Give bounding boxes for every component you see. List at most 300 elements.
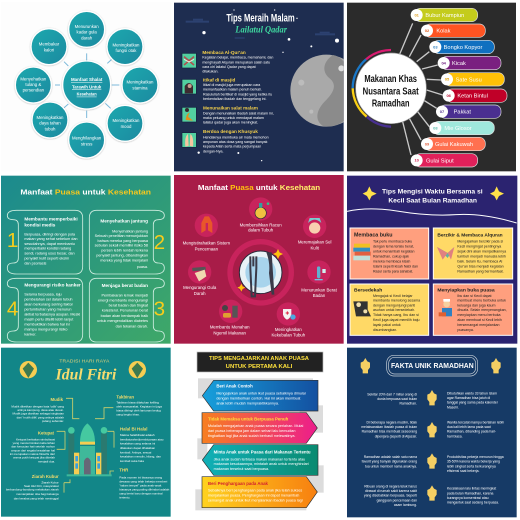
box 3: Pembakaran lemak menjadi xyxy=(102,293,148,297)
box 4: akibat terbatasnya asupan. Meski xyxy=(24,312,80,316)
fact row 3: tua untuk memberi nama anaknya. xyxy=(365,464,417,468)
tip 1: dengan memberikan contoh. Hal ini akan membuat xyxy=(216,396,300,400)
card: membaca buku: Islami seperti kisah Nabi dan xyxy=(373,264,418,268)
card: bersedekah: Bersedekah xyxy=(354,288,382,294)
box 3: Menjaga berat badan xyxy=(102,283,148,288)
text: ziarah kubur: memanjatkan doa bagi keluarga xyxy=(16,492,59,496)
circle: menyehatkan tulang dan persendian xyxy=(15,67,51,103)
fact row 4: asam lambung. xyxy=(394,503,417,507)
title xyxy=(226,12,295,35)
text: halal bi halal xyxy=(120,427,164,463)
center circle heading xyxy=(63,61,111,109)
box 2: persen lebih rendah terkena xyxy=(101,249,149,253)
text: thr: yang berisi baru dengan nominal xyxy=(119,492,163,496)
card: membaca buku: dengan tema terlalu berat, xyxy=(373,244,414,248)
card: menyiapkan buka puasa: Menyiapkan buka puasa xyxy=(437,288,495,294)
card: membaca buku xyxy=(350,228,429,279)
tip 2: Mulailah mengajarkan anak puasa secara perlahan. Mulai xyxy=(208,424,303,428)
circle: meningkatkan daya tahan tubuh xyxy=(32,102,68,138)
title xyxy=(382,189,483,204)
box 3: energi membantu mengurangi xyxy=(98,298,148,302)
box 1: penyakit kulit seperti eksim xyxy=(24,256,69,260)
item 7 xyxy=(436,105,501,118)
circle: menyehatkan tulang dan persendian: persendian xyxy=(23,88,45,93)
label: menurunkan berat badan: Badan xyxy=(313,293,326,298)
fact row 2: dua kali lebih lama pada saat xyxy=(447,425,491,429)
title: Kecil Saat Bulan Ramadhan xyxy=(388,197,477,204)
title: Idul Fitri xyxy=(55,366,117,383)
card: menyiapkan buka puasa: bersemangat menjalankan xyxy=(457,323,500,327)
text: halal bi halal: dilakukan dapat dihalalkan xyxy=(120,446,156,450)
circle: membakar kalori xyxy=(31,29,67,65)
title: FAKTA UNIK RAMADHAN xyxy=(391,363,474,370)
circle: menurunkan kadar gula darah: darah xyxy=(81,35,93,40)
tip 2: tingkatkan lagi jika anak sudah berhasil melewatinya. xyxy=(208,434,295,438)
box 3: kolesterol. Penurunan berat xyxy=(102,309,149,313)
stars xyxy=(197,9,339,161)
title: Manfaat Puasa untuk Kesehatan xyxy=(20,187,151,196)
card: berzikir dan membaca alquran: Kecil mengingat pentingnya xyxy=(457,244,501,248)
icon: ketupat kanan xyxy=(129,361,146,378)
item 6: 06 xyxy=(446,93,452,98)
label: menahan ngemil: Membantu Menahan xyxy=(210,325,250,330)
text: halal bi halal: kembali suka hala xyxy=(120,459,144,463)
tip 3 xyxy=(202,445,318,475)
panel: manfaat puasa lingkaran xyxy=(174,175,344,344)
item 7: 07 xyxy=(440,109,445,114)
text: ketupat: Ketupat xyxy=(38,430,55,435)
box 3: untuk mengendalikan diabetes xyxy=(97,319,148,323)
box 4: masih perlu diteliti lebih lanjut xyxy=(24,317,74,321)
text: halal bi halal: Makna halalbihalal adalah xyxy=(120,433,155,437)
item 6: Ketan Bintul xyxy=(457,94,488,100)
tip 2 xyxy=(202,413,317,443)
text: ketupat: yang mencerminkan kebersihan xyxy=(13,441,55,445)
text: berdoa dengan khusyuk: ampunan atas dosa yang sangat banyak xyxy=(203,140,268,144)
tip 4: semangat anak untuk ikut menjalankan ibadah puasa lagi xyxy=(208,498,303,502)
text: itikaf: Itikaf di masjid juga merupakan cara xyxy=(203,83,260,87)
box 2 xyxy=(89,210,165,274)
text: itikaf xyxy=(203,77,272,101)
fact row 2: melaksanakan ibadah puasa di bulan xyxy=(361,425,417,429)
text: takbiran: Takbiran xyxy=(116,394,134,399)
text: mudik: dari "mulih dilik' yang artinya adalah xyxy=(17,415,64,419)
central circle title: Makanan Khas xyxy=(364,74,417,85)
item 5 xyxy=(441,73,504,86)
card: membaca buku: Rasul serta para sahabat. xyxy=(373,269,413,273)
item 4 xyxy=(438,56,501,70)
circle: meningkatkan fungsi otak: Meningkatkan xyxy=(113,42,140,47)
label: mengurangi gula darah xyxy=(183,285,217,296)
item 2: Kolak xyxy=(436,28,451,34)
connector lines xyxy=(399,23,443,155)
circle: meningkatkan stamina: Meningkatkan xyxy=(127,80,154,85)
text: menunaikan salat malam: maka peluang untuk mendapat malam xyxy=(203,116,264,120)
text: mudik: Mudik diketikan dengan kata 'udik' yang xyxy=(11,404,64,408)
center circle heading: Kesehatan xyxy=(77,92,97,98)
box 3 xyxy=(89,278,165,342)
title bar xyxy=(197,352,323,372)
box 2: Menyehatkan jantung xyxy=(112,229,148,233)
card: bersedekah: disumbangkan. xyxy=(373,328,397,332)
title xyxy=(55,358,117,383)
circle: meningkatkan fungsi otak: fungsi otak xyxy=(116,48,137,53)
tip 4: Sebaiknya beri penghargaan pada anak jika telah sukses xyxy=(208,488,302,492)
box 1: dan psoriasis xyxy=(24,261,47,265)
text: takbiran: Takbiran biasa dilakukan keliling xyxy=(116,400,159,404)
circle: menyehatkan tulang dan persendian: Menyehatkan xyxy=(20,76,47,81)
stars left xyxy=(363,186,377,200)
tip 4: Beri Penghargaan pada Anak xyxy=(208,481,269,486)
text: ketupat: warna putih ketupat jika dibelah xyxy=(13,456,55,460)
tip 1: Mengajarkan anak untuk ikut puasa sebaiknya dimulai xyxy=(216,392,306,396)
text: ziarah kubur: Ziarah Kubur xyxy=(32,474,59,479)
text: berdoa dengan khusyuk: Hendaknya membuka air mata memohon xyxy=(203,135,269,139)
box 1: Berpuasa, diiringi dengan pola xyxy=(24,232,76,236)
tip 3: makanan tersebut saat berpuasa. xyxy=(214,467,269,471)
circle: membakar kalori: Membakar xyxy=(39,42,60,47)
item 5: 05 xyxy=(445,77,450,82)
box 4: membuktikan bahwa hal ini xyxy=(24,322,70,326)
text: berdoa dengan khusyuk: kepada Allah serta mata perjumpaan xyxy=(203,145,261,149)
card: berzikir dan membaca alquran xyxy=(433,228,513,279)
item 3: 03 xyxy=(433,44,438,49)
text: halal bi halal: Halal Bi Halal xyxy=(120,427,147,432)
panel: tips meraih malam lailatul qadar xyxy=(174,3,362,171)
label: sistem pencernaan: Pencernaan xyxy=(195,246,219,251)
box 1: sesudahnya, dapat membantu xyxy=(24,242,75,246)
fact row 2: Ramadhan bisa membuat seseorang xyxy=(362,430,417,434)
fact row 1: agar Ramadhan bisa jatuh di xyxy=(447,396,490,400)
text: menunaikan salat malam: Dengan menunaikan ibadah salat malam ini, xyxy=(203,111,274,115)
icon: membersihkan racun xyxy=(249,197,272,221)
text: ziarah kubur: berbondong-bondong melakukan ziarah xyxy=(6,488,59,492)
circle: menghilangkan stress: Menghilangkan xyxy=(72,136,102,141)
ring arcs xyxy=(353,50,391,127)
fact row 3: Ramadhan adalah salah satu nama xyxy=(364,455,417,459)
text: mudik xyxy=(11,397,64,423)
card: membaca buku: Membaca buku xyxy=(354,232,392,238)
text: thr: Pada momen ini biasanya orang xyxy=(119,476,162,480)
fact row 4: mengantuk saat sedang berpuasa. xyxy=(447,501,499,505)
card: menyiapkan buka puasa: membuat menu berbuka untuk xyxy=(457,299,506,303)
text: takbiran: biasa diiringi oleh lantunan bedug xyxy=(116,408,161,412)
card: menyiapkan buka puasa: puasanya. xyxy=(457,328,474,332)
card: membaca buku: Ramadhan, cukup ajak xyxy=(373,254,409,258)
text: ziarah kubur xyxy=(6,474,59,500)
icon: ketupat kiri xyxy=(20,361,37,378)
box 2: Sebuah penelitian menunjukkan xyxy=(95,234,148,238)
card: bersedekah: layak pakai untuk xyxy=(373,323,401,327)
tip 3: Jika anak sudah terbiasa makan makanan tertentu atau xyxy=(214,457,305,461)
text: takbiran xyxy=(116,394,162,416)
item 10: 10 xyxy=(414,158,420,163)
fact row 2 xyxy=(361,420,504,438)
label: menurunkan berat badan: Menurunkan Berat xyxy=(301,287,338,292)
panel: tips mengajarkan anak puasa xyxy=(174,348,344,517)
card: bersedekah: membantu menolong sesama xyxy=(373,299,420,303)
text: ketupat xyxy=(10,430,55,463)
text: membaca al-quran: dilakukan. xyxy=(202,70,218,74)
title: Lailatul Qadar xyxy=(234,24,287,35)
item 8: 08 xyxy=(433,125,438,130)
label: mengurangi gula darah: Mengurangi Gula xyxy=(183,285,217,290)
label: kekebalan tubuh xyxy=(271,327,306,338)
text: halal bi halal: kesalahan menulis, hilang, dan xyxy=(120,455,161,459)
fact row 2: Di beberapa negara muslim, tidak xyxy=(367,420,417,424)
text: menunaikan salat malam: Menunaikan salat malam xyxy=(203,105,258,110)
mosque xyxy=(67,423,112,476)
item 2: 02 xyxy=(425,28,430,33)
item 7: Pakkat xyxy=(454,110,471,116)
label: sistem pencernaan xyxy=(183,241,230,251)
moon xyxy=(290,54,344,127)
card: menyiapkan buka puasa: keluarga dan juga kaum xyxy=(457,303,496,307)
text: berdoa dengan khusyuk: dengan-Nya. xyxy=(203,149,223,153)
box 4 xyxy=(7,278,83,342)
title bar: UNTUK PERTAMA KALI xyxy=(226,364,293,370)
label: menahan ngemil xyxy=(210,325,250,335)
fact row 2: Wanita tercatat mampu bertahan lebih xyxy=(447,420,504,424)
center circle heading: Manfaat Shalat xyxy=(71,77,103,83)
card: membaca buku: mereka membaca kisah xyxy=(373,259,410,263)
item 2 xyxy=(421,24,485,37)
fact row 4: gangguan pencernaan dan xyxy=(377,498,417,502)
text: thr: THR xyxy=(119,468,129,473)
panel: fakta unik ramadhan xyxy=(347,348,517,517)
card: membaca buku: untuk menambah kegiatan xyxy=(373,249,414,253)
circle: meningkatkan mood: Meningkatkan xyxy=(113,118,140,123)
box 1: makan yang sehat sebelum dan xyxy=(24,237,78,241)
tip 1: Beri Anak Contoh xyxy=(216,384,253,389)
box 1 xyxy=(7,210,83,274)
fact row 3 xyxy=(362,453,504,473)
fact row 4: Ribuan orang di negara teluk harus xyxy=(364,484,417,488)
fact row 4: Kecelakaan lalu lintas meningkat xyxy=(447,487,496,491)
label: mengurangi gula darah: Darah xyxy=(194,291,206,296)
card: bersedekah: Kecil juga dapat memilih baju xyxy=(373,318,420,322)
text: itikaf: Rasulullah beritikaf di masjid yang ketika itu xyxy=(203,92,272,96)
box 3: berat badan dan tingkat xyxy=(109,303,149,307)
circle: menyehatkan tulang dan persendian: tulang & xyxy=(25,82,41,87)
text: ketupat: ampun dari segala kesalahan hal xyxy=(11,448,55,452)
text: thr: tertentu. xyxy=(119,496,130,500)
label: membersihkan racun: Membersihkan Racun xyxy=(240,222,282,227)
tip 2: Tidak Memaksa untuk Berpuasa Penuh xyxy=(208,416,289,421)
box 1: sendi, radang usus besar, dan xyxy=(24,252,75,256)
icon: menurunkan berat badan xyxy=(307,260,331,284)
fact row 3: lebih singkat serta berkurangnya xyxy=(447,464,496,468)
fact row 1: tanggal yang sama pada kalender xyxy=(447,401,499,405)
card: berzikir dan membaca alquran: Ramadhan yang bermanfaat. xyxy=(457,269,504,273)
central circle title xyxy=(356,53,426,124)
item 3: Bongko Kopyor xyxy=(444,45,482,51)
text: takbiran: yang begitu khas. xyxy=(116,412,140,416)
fact row 4: yang disebabkan berpuasa. Seperti xyxy=(364,494,417,498)
box 2: penyakit jantung, dibandingkan xyxy=(96,253,148,257)
item 9: Gulai Kakuwah xyxy=(435,142,473,148)
item 1: Bubur Kampiun xyxy=(425,13,464,19)
card: menyiapkan buka puasa: akan membuat si Kecil lebih xyxy=(457,318,502,322)
label: membersihkan racun: dalam Tubuh xyxy=(248,228,274,233)
item 10 xyxy=(411,154,478,167)
circle: meningkatkan stamina: stamina xyxy=(132,85,148,90)
title bar: TIPS MENGAJARKAN ANAK PUASA xyxy=(209,356,309,362)
panel: tips mengisi waktu xyxy=(347,176,517,344)
text: membaca al-quran: cara ciri lailatul Qadar yang dapat xyxy=(202,65,256,69)
circle: menghilangkan stress xyxy=(69,122,105,158)
item 1: 01 xyxy=(414,12,420,17)
card: menyiapkan buka puasa xyxy=(433,284,513,335)
circle: menurunkan kadar gula darah: kadar gula xyxy=(77,30,97,35)
grey backdrop blocks xyxy=(195,378,324,510)
text: membaca al-quran xyxy=(202,50,273,74)
card: berzikir dan membaca alquran: Berzikir & Membaca Alquran xyxy=(437,232,503,238)
text: ketupat: dan kesucian hati setelah mohon xyxy=(11,445,55,449)
box 1: Membantu memperbaiki xyxy=(24,217,78,222)
text: membaca al-quran: Membaca Al-Qur'an xyxy=(202,50,246,55)
label: meremajakan sel kulit xyxy=(298,240,332,251)
box 2: Menyehatkan jantung xyxy=(100,219,148,224)
card: menyiapkan buka puasa: Ibu dan si Kecil dapat xyxy=(457,294,492,298)
tip 1: anak lebih mudah mempraktikkannya. xyxy=(216,401,279,405)
tip 4: menjalankan puasa. Penghargaan ini dapat menambah xyxy=(208,493,299,497)
label: meremajakan sel kulit: Kulit xyxy=(310,246,320,251)
item 9 xyxy=(421,137,485,151)
box 4: Selama berpuasa, laju xyxy=(24,292,62,296)
icon: berdoa xyxy=(182,133,196,147)
text: itikaf: Itikaf di masjid xyxy=(203,77,235,82)
box 4: 4 xyxy=(7,298,18,321)
panel: manfaat shalat tarawih xyxy=(1,2,171,171)
box 4: Mengurangi risiko kanker xyxy=(24,283,81,288)
item 6 xyxy=(443,89,507,102)
fact row 1: dunia berpuasa saat bulan xyxy=(377,397,417,401)
item 5: Sate Susu xyxy=(456,77,482,83)
circle: membakar kalori: kalori xyxy=(44,48,54,53)
text: thr xyxy=(119,468,170,500)
fact row 2: hari biasa. xyxy=(447,434,463,438)
text: ziarah kubur: Saat Idul Fitri, masyarakat xyxy=(24,484,59,488)
icon: kekebalan tubuh xyxy=(277,302,300,326)
card: berzikir dan membaca alquran: tumbuh menjadi manusia lebih xyxy=(457,254,506,258)
text: ketupat: ini merupakan makna filosofis dari xyxy=(10,452,55,456)
label: membersihkan racun xyxy=(240,222,282,233)
connector lines xyxy=(57,398,114,493)
circle: meningkatkan fungsi otak xyxy=(107,29,143,65)
text: membaca al-quran: Kegiatan belajar, membaca, memahami, dan xyxy=(202,56,273,60)
text: menunaikan salat malam: lailatul qadar juga akan meningkat. xyxy=(203,121,258,125)
card: berzikir dan membaca alquran: baik. Selain itu, membaca Al xyxy=(457,259,502,263)
text: mudik: Mudik juga diartikan sebagai singkatan xyxy=(13,412,64,416)
box 2: bahwa mereka yang berpuasa xyxy=(98,239,149,243)
item 8: Mie Glosor xyxy=(444,126,472,132)
title: Manfaat Puasa untuk Kesehatan xyxy=(198,185,320,192)
card: berzikir dan membaca alquran: sejak dini akan menjadikannya xyxy=(457,249,506,253)
central circle title: Nusantara Saat xyxy=(363,86,419,97)
card: bersedekah: asuhan untuk bersedekah. xyxy=(373,308,415,312)
card: bersedekah xyxy=(350,284,429,335)
fact row 3: Produktivitas pekerja menurun hingga xyxy=(447,455,504,459)
text: ziarah kubur: Ziarah Kubur xyxy=(41,480,59,484)
card: menyiapkan buka puasa: menyiapkan menu berbuka xyxy=(457,313,501,317)
text: ketupat: menjadi dua. xyxy=(38,459,55,463)
box 3: dan tekanan darah. xyxy=(116,324,148,328)
label: kekebalan tubuh: Kekebalan Tubuh xyxy=(271,333,306,338)
box 2: sebulan sekali memiliki risiko 58 xyxy=(95,244,148,248)
icon: mengurangi gula darah xyxy=(188,260,211,284)
item 4: 04 xyxy=(441,60,447,65)
circle: menurunkan kadar gula darah xyxy=(69,11,105,47)
card: bersedekah: Tidak hanya uang, Ibu dan si xyxy=(373,313,419,317)
wave divider xyxy=(347,209,517,223)
box 3: badan akan berdampak baik xyxy=(101,314,148,318)
label: sistem pencernaan: Mengistirahatkan Sistem xyxy=(183,241,230,246)
panel: tradisi idul fitri xyxy=(1,348,171,517)
title: Tips Mengisi Waktu Bersama si xyxy=(382,189,483,196)
fact row 2: Ramadhan, dibanding pada hari- xyxy=(447,430,496,434)
central circle title: Ramadhan xyxy=(372,98,409,109)
card: membaca buku: Tak perlu membaca buku xyxy=(373,240,412,244)
panel: manfaat puasa untuk kesehatan (hijau) xyxy=(1,176,171,344)
label: menahan ngemil: Ngemil Makanan xyxy=(213,330,246,335)
text: halal bi halal: kesalahan yang selama ini xyxy=(120,442,156,446)
circle: meningkatkan daya tahan tubuh: Meningkatkan xyxy=(37,115,64,120)
item 3 xyxy=(429,40,494,54)
title: TRADISI HARI RAYA xyxy=(59,358,110,364)
card: bersedekah: Mengajak si Kecil belajar xyxy=(373,294,413,298)
box 2: puasa. xyxy=(137,265,148,269)
fact row 1: Dibutuhkan waktu 33 tahun Islam xyxy=(447,392,497,396)
fact row 1: Sekitar 20% dari 7 miliar orang di xyxy=(367,393,417,397)
circle: menghilangkan stress: stress xyxy=(81,141,92,146)
icon: quran xyxy=(182,53,196,68)
central plate xyxy=(227,239,294,306)
panel: makanan khas nusantara xyxy=(347,3,516,171)
box 4: mampu mengurangi risiko xyxy=(24,327,67,331)
text: mudik: artinya kampung, desa atau dusun. xyxy=(17,408,64,412)
icon: sistem pencernaan xyxy=(195,214,218,237)
text: thr: biasanya yang paling dihindari adalah xyxy=(119,488,170,492)
circle: meningkatkan daya tahan tubuh: daya tahan xyxy=(39,121,61,126)
text: mudik: pulang sebentar. xyxy=(42,419,64,423)
box 3: 3 xyxy=(154,298,165,321)
circle: meningkatkan stamina xyxy=(122,67,158,103)
text: takbiran: oleh masyarakat. Kegiatan ini juga xyxy=(116,404,162,408)
box 1: 1 xyxy=(7,229,18,252)
tip 1 xyxy=(202,380,318,411)
item 9: 09 xyxy=(425,141,430,146)
circle: meningkatkan mood xyxy=(107,105,143,141)
circle: meningkatkan daya tahan tubuh: tubuh xyxy=(45,126,56,131)
lantern top left xyxy=(361,358,370,373)
icon: meremajakan sel kulit xyxy=(303,215,326,238)
circle: meningkatkan mood: mood xyxy=(121,124,132,129)
label: meremajakan sel kulit: Meremajakan Sel xyxy=(298,240,332,245)
card: menyiapkan buka puasa: dhuafa. Selain menyenangkan, xyxy=(457,308,507,312)
fact row 1 xyxy=(367,390,499,409)
text: itikaf: memanfaatkan malam penuh berkah. xyxy=(203,88,262,92)
text: membaca al-quran: menghayati Alquran merupakan salah satu xyxy=(202,60,270,64)
lantern top right xyxy=(491,358,501,373)
box 4: pembelahan sel dalam tubuh xyxy=(24,297,73,301)
box 1: memperbaiki kondisi radang xyxy=(24,247,71,251)
item 1 xyxy=(411,8,478,22)
tip 2: dari puasa beberapa jam dalam sehari lalu kemudian xyxy=(208,429,295,433)
title: Tips Meraih Malam xyxy=(226,12,295,24)
stars right xyxy=(490,186,504,200)
clouds xyxy=(186,19,335,39)
